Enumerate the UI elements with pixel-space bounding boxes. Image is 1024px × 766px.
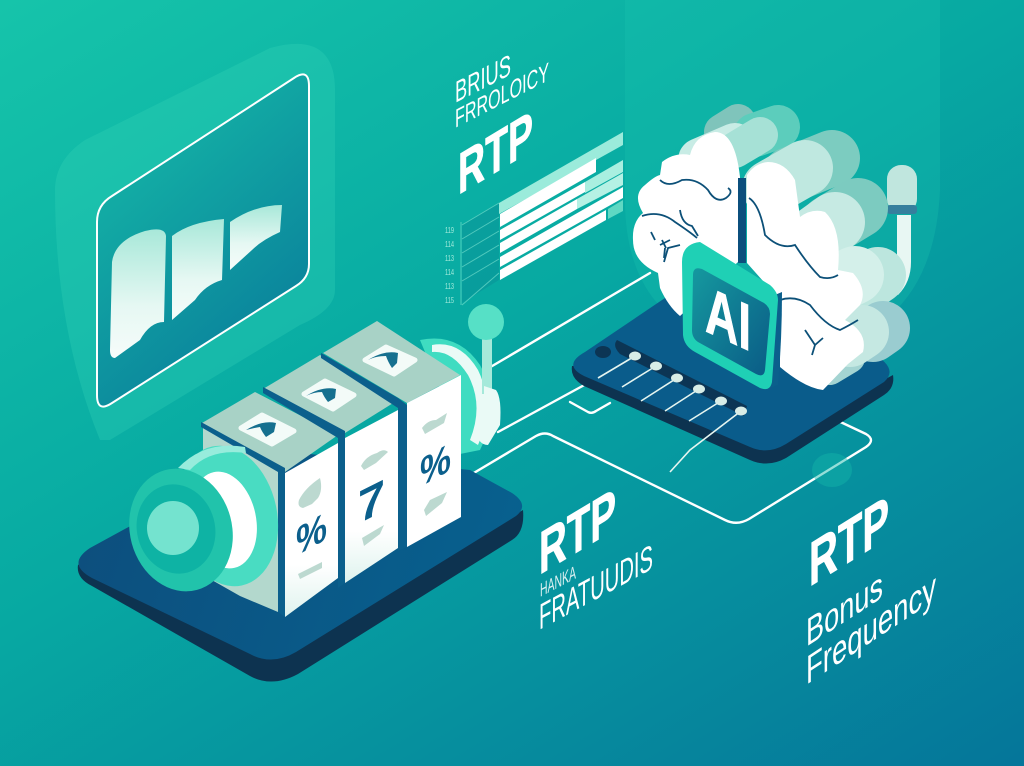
chart row labels: 114 [445, 268, 454, 277]
neural traces [642, 180, 858, 355]
reel 1 [201, 392, 338, 617]
glow panel behind brain [625, 0, 940, 335]
heading: RTP top: RTP [458, 98, 533, 208]
lever stem [482, 334, 492, 394]
RTP heading: RTP [809, 482, 889, 601]
panel glow [55, 44, 335, 440]
central fissure [738, 178, 746, 263]
chart leader lines [461, 203, 499, 305]
back disc [163, 436, 291, 596]
reel 1 percent: % [296, 504, 327, 565]
base top [573, 298, 890, 450]
reel 1 top [202, 392, 338, 472]
long loop line [462, 418, 871, 523]
faint node under AI base [812, 453, 852, 487]
AI chip [682, 242, 782, 390]
chip shadow [765, 292, 782, 390]
liver lobe 2 [172, 219, 224, 320]
chip label: AI [705, 271, 751, 366]
chart row labels: 113 [445, 282, 454, 291]
chart row labels [445, 226, 454, 305]
pin knobs [629, 352, 747, 416]
reel 1 front [285, 443, 338, 617]
probe head [887, 165, 917, 213]
frequency caption: Frequency [806, 564, 936, 694]
spool white rim [432, 344, 486, 445]
inner ring [127, 475, 225, 583]
glass panel: liver screen [55, 44, 335, 440]
hub [147, 501, 199, 555]
front disc [116, 457, 246, 603]
probe stem [886, 215, 911, 295]
reel 1 side face [203, 428, 278, 612]
connector lines [462, 273, 871, 523]
line from lever to AI base [482, 273, 650, 372]
reel 2 smudge top [361, 450, 388, 470]
reel 2 seven: 7 [358, 470, 385, 534]
platform edge [78, 510, 523, 682]
microphone probe [886, 165, 917, 295]
liver lobe 1 [110, 229, 166, 358]
heading line 2: FRROLOICY [455, 57, 549, 134]
white drum [183, 465, 265, 575]
mint header bar [499, 132, 623, 214]
reel 3 top [323, 321, 460, 403]
reel 3 edge [321, 353, 407, 551]
reel 1 icon plate [241, 415, 294, 444]
reel 3 icon mark [368, 352, 398, 368]
chart row labels: 113 [445, 254, 454, 263]
small caption: HANKA [540, 562, 576, 602]
label: RTP bonus frequency [806, 482, 936, 694]
chart row labels: 115 [445, 296, 454, 305]
chart row labels: 119 [445, 226, 454, 235]
heading: bonus frequency top [455, 47, 549, 134]
right hemisphere [747, 162, 864, 390]
screen frame [97, 74, 309, 407]
spool ring [420, 338, 491, 455]
chart row labels: 114 [445, 240, 454, 249]
pin wires [598, 356, 741, 472]
reel 3 smudge bottom [424, 492, 447, 516]
reel 2 front [345, 410, 398, 583]
dark dot [595, 346, 611, 358]
probe collar [887, 205, 917, 214]
reel 2 icon mark [306, 388, 336, 402]
reel 1 smudge bottom [298, 562, 322, 579]
mid lobes [700, 135, 862, 340]
base edge [572, 365, 893, 464]
reel 1 top edge [201, 422, 285, 617]
reel 2 top [263, 355, 398, 433]
line to AI base mid [498, 383, 588, 432]
reel 2 smudge bottom [362, 525, 384, 546]
reel 3 smudge top [422, 413, 447, 434]
reel 3 [321, 321, 461, 551]
short bracket line [570, 402, 610, 413]
liver lobe 3 [230, 205, 282, 270]
brain [633, 122, 883, 390]
back lobes [722, 122, 883, 370]
bar 1 [500, 158, 596, 227]
reel 2 icon plate [304, 381, 354, 409]
lever base [476, 386, 500, 445]
reel 2 edge [263, 387, 345, 588]
chart shaded axis region [462, 203, 499, 303]
reel 3 percent: % [420, 435, 451, 496]
chip face [692, 268, 770, 375]
left hemisphere [633, 132, 740, 316]
reel 1 smudge top [298, 478, 321, 508]
slot machine reels [116, 304, 504, 617]
platform top [78, 450, 522, 660]
heading line 1: BRIUS [455, 47, 511, 110]
AI base platform [572, 298, 893, 472]
slot bar [615, 340, 747, 416]
right spool [420, 304, 504, 455]
reel 3 icon plate [365, 347, 415, 374]
bar chart [445, 132, 623, 305]
reel 1 icon mark [246, 422, 276, 437]
bar 4 [500, 187, 623, 267]
bar 5 [500, 200, 623, 280]
fractions caption: FRATUUDIS [539, 537, 653, 638]
chip frame [682, 242, 778, 389]
reel 3 front [407, 375, 461, 547]
lever knob [468, 304, 504, 340]
back disc highlight [178, 446, 246, 470]
RTP heading: RTP [539, 474, 616, 588]
reel 2 [263, 355, 398, 588]
label: RTP fractions [539, 474, 653, 638]
left spool [116, 436, 291, 603]
bar 3 [500, 173, 623, 253]
left platform [78, 450, 523, 682]
bonus caption: Bonus [806, 562, 883, 656]
bar 2 [500, 160, 623, 240]
